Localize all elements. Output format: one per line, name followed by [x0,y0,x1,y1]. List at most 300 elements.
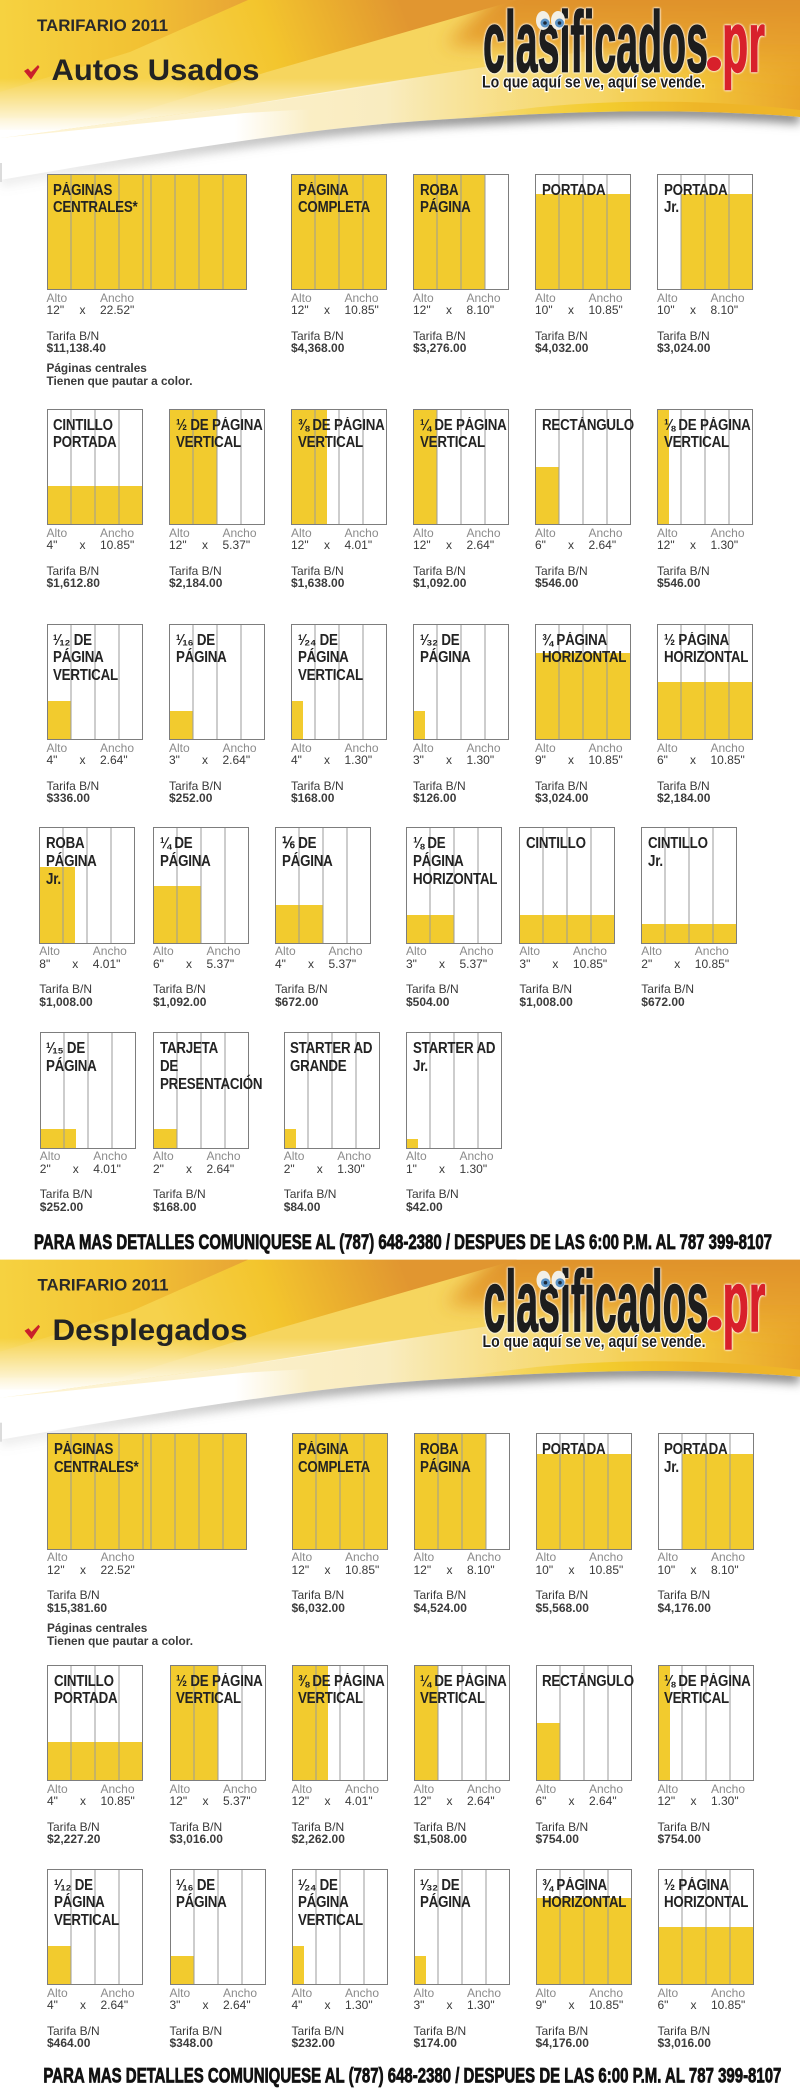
card: 1/24 de página vertical: ¹⁄₂₄ DE [298,1877,338,1894]
header background [0,0,800,186]
card: 3/8 de página vertical: $2,262.00 [292,1832,345,1846]
card: Cintillo portada: Alto [47,1782,68,1796]
card: 1/32 de página: $174.00 [414,2036,457,2050]
card: Roba página Jr.: $1,008.00 [39,995,93,1009]
card: Roba página: x [446,303,452,317]
card: Portada Jr.: Alto [657,291,678,305]
title: Tarifario 2011: TARIFARIO 2011 [38,1276,168,1295]
card: 1/32 de página: Ancho [466,741,501,755]
card: 1/8 de página horizontal: 3" [406,957,417,971]
card: 1/4 de página: PÁGINA [160,853,210,870]
card: 1/8 de página vertical: VERTICAL [664,434,728,451]
card: Roba página Jr.: Tarifa B/N [39,982,92,996]
card: 1/16 de página: Alto [169,741,190,755]
card: 1/2 de página vertical: $2,184.00 [169,576,222,590]
card: Página completa: PÁGINA [298,1441,349,1458]
card: 1/15 de página [40,1032,136,1214]
card: Página completa: $4,368.00 [291,341,344,355]
card: 1/12 de página vertical: x [80,753,86,767]
card: Página completa: Ancho [345,1550,379,1564]
card: 1/16 de página: 3" [169,753,180,767]
card: Portada: 10" [536,1563,553,1577]
card: 1/12 de página vertical [47,1869,143,2059]
card: 1/4 de página: 6" [153,957,164,971]
heading: Desplegados: Desplegados [52,1314,248,1347]
card: Cintillo Jr.: x [674,957,680,971]
card: Portada Jr.: $4,176.00 [658,1601,711,1615]
card: Cintillo portada: $1,612.80 [46,576,100,590]
card: 1/4 de página vertical: Ancho [466,526,501,540]
card: 1/24 de página vertical: Tarifa B/N [292,2024,344,2038]
card: 1/8 de página vertical: 12" [657,538,675,552]
card: Portada: Ancho [589,1550,623,1564]
card: 1/4 de página vertical: x [446,538,452,552]
card: 1/8 de página vertical: VERTICAL [664,1690,729,1707]
card: Roba página [414,1433,510,1615]
card: 1/16 de página: x [202,1998,208,2012]
card: Starter ad Jr. [406,1032,502,1214]
card: 1/4 de página: Tarifa B/N [153,982,206,996]
card: Starter ad Jr.: 1.30" [460,1162,487,1176]
card: Rectángulo [536,1665,632,1855]
card: Starter ad grande: $84.00 [284,1200,320,1214]
card: 3/8 de página vertical [292,1665,388,1846]
card: 1/32 de página: ¹⁄₃₂ DE [420,1877,459,1894]
card: 3/8 de página vertical: VERTICAL [298,434,362,451]
card: Cintillo: $1,008.00 [519,995,573,1009]
card: Rectángulo: Ancho [588,526,623,540]
card: 1/6 de página: PÁGINA [282,853,332,870]
card: Tarjeta de presentación: $168.00 [153,1200,196,1214]
card: 1/4 de página vertical: Alto [414,1782,434,1796]
card: Cintillo portada [46,409,143,590]
card: 1/4 de página: $1,092.00 [153,995,206,1009]
card: Roba página: $3,276.00 [413,341,466,355]
card: Roba página Jr.: x [72,957,78,971]
card: Página completa: Alto [291,291,312,305]
note: páginas centrales: Tienen que pautar a color. [46,374,192,388]
card: Cintillo portada: PORTADA [54,1690,117,1707]
card: 1/12 de página vertical: $464.00 [47,2036,90,2050]
card: 1/4 de página [153,827,249,1009]
card: 1/32 de página: x [446,753,452,767]
card: 1/12 de página vertical: ¹⁄₁₂ DE [53,632,92,649]
card: Portada: $4,032.00 [535,341,588,355]
card: Página completa: 10.85" [345,1563,379,1577]
card: 1/16 de página: Tarifa B/N [169,779,222,793]
card: Portada: Alto [536,1550,556,1564]
card: Página completa: 12" [291,303,309,317]
note: páginas centrales: Páginas centrales [46,361,147,375]
card: Rectángulo: RECTÁNGULO [542,1673,634,1690]
card: 1/2 página horizontal: Ancho [711,1986,745,2000]
card: Páginas centrales: CENTRALES* [53,199,138,216]
card: 1/2 página horizontal: Tarifa B/N [658,2024,710,2038]
card: 3/4 página horizontal [536,1869,632,2059]
card: Starter ad Jr.: Alto [406,1149,427,1163]
card: Roba página Jr.: 8" [39,957,50,971]
card: 1/32 de página: 1.30" [467,1998,495,2012]
card: 1/2 de página vertical: 12" [169,538,187,552]
card: 1/8 de página vertical: $754.00 [658,1832,701,1846]
card: Páginas centrales: Ancho [100,291,134,305]
card: Páginas centrales: Alto [46,291,67,305]
card: 1/4 de página vertical: Tarifa B/N [413,564,466,578]
card: 1/32 de página: Alto [414,1986,434,2000]
header: Autos Usados [0,0,800,186]
card: 1/12 de página vertical: Tarifa B/N [47,2024,100,2038]
card: Página completa: 12" [292,1563,309,1577]
card: Portada Jr.: Alto [658,1550,678,1564]
logo: clasificados.pr: Lo que aquí se ve, aquí se vende. [482,74,705,92]
card: Páginas centrales: $11,138.40 [46,341,106,355]
card: 1/12 de página vertical: 4" [47,1998,58,2012]
card: 1/4 de página vertical: VERTICAL [420,1690,485,1707]
card: 1/2 de página vertical: VERTICAL [176,434,240,451]
card: 3/8 de página vertical: Alto [292,1782,312,1796]
card: 3/8 de página vertical: Tarifa B/N [292,1820,344,1834]
card: Rectángulo: $754.00 [536,1832,579,1846]
card: Portada Jr.: Ancho [711,1550,745,1564]
card: 3/4 página horizontal: Ancho [588,741,623,755]
card: 1/15 de página: x [73,1162,79,1176]
card: 3/8 de página vertical: VERTICAL [298,1690,363,1707]
card: 1/2 de página vertical: ½ DE PÁGINA [176,1673,263,1690]
card: Cintillo Jr.: $672.00 [641,995,685,1009]
card: 1/8 de página vertical: ⅛ DE PÁGINA [664,1673,751,1690]
card: 1/6 de página: x [308,957,314,971]
card: 1/4 de página vertical: 2.64" [467,1794,495,1808]
card: 1/24 de página vertical: PÁGINA [298,649,348,666]
card: Portada: PORTADA [542,182,605,199]
card: 1/24 de página vertical: 4" [291,753,302,767]
card: Portada [535,174,631,355]
card: Páginas centrales: Tarifa B/N [47,1588,100,1602]
card: Cintillo portada: 10.85" [100,1794,135,1808]
card: 1/8 de página vertical: Ancho [710,526,745,540]
card: 1/12 de página vertical: $336.00 [46,791,90,805]
card: 1/8 de página horizontal: HORIZONTAL [412,871,497,888]
card: 1/24 de página vertical: 4" [292,1998,302,2012]
card: 1/24 de página vertical: PÁGINA [298,1894,349,1911]
card: Roba página: Tarifa B/N [414,1588,466,1602]
card: Cintillo Jr. [641,827,737,1009]
card: 1/24 de página vertical: Tarifa B/N [291,779,344,793]
card: 1/24 de página vertical: Alto [291,741,312,755]
card: 1/12 de página vertical: Ancho [100,1986,135,2000]
card: 1/8 de página vertical: ⅛ DE PÁGINA [664,416,750,434]
card: Tarjeta de presentación: 2" [153,1162,164,1176]
card: 1/32 de página: 1.30" [466,753,494,767]
card: Starter ad grande: Ancho [337,1149,371,1163]
card: 1/2 página horizontal: x [690,1998,696,2012]
icon: red check [24,1325,40,1339]
card: Starter ad grande: Alto [284,1149,304,1163]
card: Cintillo portada: CINTILLO [54,1673,113,1690]
card: 1/6 de página: Alto [275,944,296,958]
card: Portada: 10" [535,303,553,317]
card: 1/4 de página vertical [414,1665,510,1855]
card: 1/4 de página vertical: Alto [413,526,434,540]
card: Página completa: PÁGINA [298,182,348,199]
card: Roba página [413,174,509,355]
card: 3/8 de página vertical: $1,638.00 [291,576,344,590]
card: Páginas centrales: 22.52" [100,1563,135,1577]
card: 3/8 de página vertical: x [324,1794,330,1808]
card: 1/4 de página: 5.37" [206,957,234,971]
card: 1/24 de página vertical: x [324,1998,330,2012]
card: 1/32 de página: 3" [414,1998,424,2012]
card: Roba página Jr. [39,827,135,1009]
card: 1/32 de página: Tarifa B/N [414,2024,466,2038]
card: 1/16 de página: 2.64" [222,753,250,767]
card: Cintillo Jr.: Alto [641,944,662,958]
card: Cintillo Jr.: Tarifa B/N [641,982,694,996]
card: Páginas centrales: $15,381.60 [47,1601,107,1615]
card: 3/4 página horizontal: 9" [535,753,546,767]
card: 3/8 de página vertical: Ancho [344,526,379,540]
card: 1/4 de página vertical [413,409,509,590]
card: 1/15 de página: ¹⁄₁₅ DE [46,1040,85,1057]
card: 1/8 de página vertical: 12" [658,1794,675,1808]
card: 3/4 página horizontal: Tarifa B/N [535,779,588,793]
card: 1/4 de página: Ancho [206,944,241,958]
card: Rectángulo: RECTÁNGULO [542,416,633,434]
card: 3/4 página horizontal: $4,176.00 [536,2036,589,2050]
card: 1/24 de página vertical: $168.00 [291,791,334,805]
header background [0,1260,800,1446]
card: Portada: Alto [535,291,556,305]
card: 1/32 de página: PÁGINA [420,649,470,666]
card: Cintillo: Tarifa B/N [519,982,572,996]
card: Portada: x [568,1563,574,1577]
card: 1/16 de página: Tarifa B/N [170,2024,222,2038]
card: 1/8 de página vertical: x [690,1794,696,1808]
card: 1/16 de página [170,1869,266,2059]
card: Cintillo portada: Ancho [100,1782,135,1796]
card: 3/4 página horizontal: Alto [535,741,556,755]
card: 1/6 de página [275,827,371,1009]
card: Páginas centrales: 12" [47,1563,65,1577]
heading: Autos Usados: Autos Usados [52,54,260,87]
card: Cintillo portada: x [80,538,86,552]
card: Portada: PORTADA [542,1441,605,1458]
card: 1/2 de página vertical: Tarifa B/N [170,1820,222,1834]
section: Autos Usados rate cards [39,174,753,1214]
card: 1/15 de página: Alto [40,1149,60,1163]
card: Páginas centrales: 22.52" [100,303,134,317]
card: Cintillo portada: PORTADA [53,434,116,451]
card: 1/24 de página vertical [291,624,387,805]
card: Rectángulo: x [568,538,574,552]
card: 1/2 de página vertical: Ancho [222,526,257,540]
card: 1/24 de página vertical: Alto [292,1986,312,2000]
card: 1/32 de página: 3" [413,753,424,767]
card: Roba página Jr.: ROBA [46,835,84,852]
card: Rectángulo: $546.00 [535,576,578,590]
card: Roba página: Ancho [466,291,501,305]
card: 1/15 de página: 4.01" [93,1162,121,1176]
card: Portada Jr.: x [690,303,696,317]
card: 1/2 de página vertical: ½ DE PÁGINA [176,416,262,434]
card: 1/2 de página vertical: 12" [170,1794,187,1808]
card: 3/8 de página vertical: 4.01" [344,538,372,552]
card: Cintillo Jr.: Jr. [648,853,663,870]
card: 1/2 página horizontal: 10.85" [710,753,745,767]
card: 1/6 de página: $672.00 [275,995,318,1009]
card: Portada: x [568,303,574,317]
card: 1/12 de página vertical: PÁGINA [54,1894,104,1911]
card: Página completa [291,174,387,355]
card: 1/2 página horizontal: x [690,753,696,767]
card: Starter ad grande: x [317,1162,323,1176]
card: 1/8 de página horizontal: Ancho [460,944,494,958]
card: 3/4 página horizontal: ¾ PÁGINA [542,1877,607,1894]
card: 1/4 de página vertical: $1,508.00 [414,1832,467,1846]
card: Roba página: ROBA [420,1441,458,1458]
card: 1/12 de página vertical: VERTICAL [53,667,118,684]
card: Starter ad grande [284,1032,380,1214]
card: 1/32 de página: PÁGINA [420,1894,471,1911]
card: 1/24 de página vertical: VERTICAL [298,667,362,684]
card: 1/2 página horizontal: ½ PÁGINA [664,1877,729,1894]
card: Portada: 10.85" [589,1563,623,1577]
card: 1/12 de página vertical: Alto [47,1986,68,2000]
card: 1/8 de página vertical: Alto [658,1782,678,1796]
icon: red check [24,65,40,80]
card: 1/24 de página vertical: VERTICAL [298,1912,363,1929]
card: Cintillo [519,827,615,1009]
card: 1/8 de página vertical: $546.00 [657,576,700,590]
card: Cintillo portada: 4" [46,538,57,552]
card: 1/8 de página vertical: 1.30" [711,1794,739,1808]
card: Páginas centrales: PÁGINAS [53,182,112,199]
card: 1/2 página horizontal: $3,016.00 [658,2036,711,2050]
card: 1/12 de página vertical: VERTICAL [54,1912,118,1929]
card: 1/8 de página horizontal: Tarifa B/N [406,982,459,996]
card: Cintillo portada: 10.85" [100,538,134,552]
card: 1/2 de página vertical: $3,016.00 [170,1832,223,1846]
card: 3/8 de página vertical: ⅜ DE PÁGINA [298,416,384,434]
card: 1/2 de página vertical [169,409,265,590]
card: Portada Jr. [657,174,753,355]
card: 1/4 de página vertical: 2.64" [466,538,494,552]
card: 1/32 de página: Tarifa B/N [413,779,466,793]
card: Cintillo: CINTILLO [526,835,586,852]
card: 1/2 página horizontal: HORIZONTAL [664,1894,748,1911]
card: 1/24 de página vertical: x [324,753,330,767]
card: 1/4 de página vertical: 12" [413,538,431,552]
card: Cintillo Jr.: CINTILLO [648,835,708,852]
card: Starter ad grande: Tarifa B/N [284,1187,336,1201]
note: páginas centrales: Tienen que pautar a color. [47,1634,193,1648]
card: Starter ad Jr.: Ancho [460,1149,494,1163]
card: 1/2 página horizontal [658,1869,754,2059]
card: 1/16 de página: x [202,753,208,767]
card: 3/4 página horizontal: 10.85" [588,753,623,767]
card: 1/2 página horizontal: 6" [658,1998,668,2012]
card: Roba página: Ancho [467,1550,501,1564]
card: Tarjeta de presentación: 2.64" [206,1162,234,1176]
card: 1/2 de página vertical: x [202,538,208,552]
card: 1/15 de página: $252.00 [40,1200,83,1214]
section: Desplegados rate cards [47,1433,754,2050]
card: 1/32 de página: x [446,1998,452,2012]
card: Tarjeta de presentación: PRESENTACIÓN [160,1076,262,1093]
card: 3/4 página horizontal: 9" [536,1998,546,2012]
card: Tarjeta de presentación: Ancho [206,1149,241,1163]
card: 1/24 de página vertical: $232.00 [292,2036,335,2050]
card: 3/4 página horizontal [535,624,631,805]
card: 1/16 de página: Ancho [223,1986,257,2000]
card: Portada [536,1433,632,1615]
card: 1/16 de página: ¹⁄₁₆ DE [176,632,214,649]
card: Cintillo portada: CINTILLO [53,416,113,434]
card: Cintillo Jr.: Ancho [695,944,729,958]
card: 1/2 de página vertical: Tarifa B/N [169,564,222,578]
card: 1/12 de página vertical: Ancho [100,741,134,755]
card: Página completa: x [324,303,330,317]
card: 1/12 de página vertical [46,624,143,805]
card: 1/12 de página vertical: ¹⁄₁₂ DE [54,1877,92,1894]
card: 3/4 página horizontal: 10.85" [589,1998,623,2012]
card: Portada Jr.: 8.10" [710,303,738,317]
card: Páginas centrales [47,1433,247,1615]
card: Roba página Jr.: 4.01" [93,957,120,971]
card: Roba página: 8.10" [467,1563,495,1577]
card: 1/6 de página: 4" [275,957,286,971]
card: Rectángulo [535,409,634,590]
card: 1/4 de página vertical: Ancho [467,1782,501,1796]
card: 1/12 de página vertical: x [80,1998,86,2012]
card: 1/16 de página: $252.00 [169,791,212,805]
card: Rectángulo: Ancho [589,1782,623,1796]
card: Página completa: COMPLETA [298,1459,370,1476]
card: 1/8 de página vertical: 1.30" [710,538,738,552]
card: Páginas centrales: 12" [46,303,64,317]
card: 1/32 de página: $126.00 [413,791,456,805]
card: 3/4 página horizontal: Tarifa B/N [536,2024,588,2038]
card: Cintillo: Alto [519,944,540,958]
card: 1/8 de página horizontal: PÁGINA [412,853,463,870]
card: 3/8 de página vertical: 12" [291,538,309,552]
card: 1/32 de página: Alto [413,741,434,755]
card: 1/4 de página vertical: 12" [414,1794,431,1808]
card: 3/4 página horizontal: Alto [536,1986,556,2000]
card: 1/2 página horizontal: Ancho [710,741,745,755]
card: 1/24 de página vertical [292,1869,388,2059]
card: 1/8 de página horizontal [406,827,502,1009]
card: Starter ad grande: 1.30" [337,1162,365,1176]
card: Portada Jr.: 10" [657,303,675,317]
card: Página completa: x [324,1563,330,1577]
card: 1/8 de página vertical: x [690,538,696,552]
card: 3/4 página horizontal: Ancho [589,1986,623,2000]
card: 1/2 página horizontal: $2,184.00 [657,791,710,805]
logo: clasificados.pr: Lo que aquí se ve, aquí se vende. [482,1333,706,1351]
card: Rectángulo: Tarifa B/N [536,1820,588,1834]
header: Desplegados [0,1254,800,1446]
card: 1/12 de página vertical: 2.64" [100,1998,128,2012]
card: Cintillo: 10.85" [573,957,607,971]
card: 1/6 de página: ⅙ DE [282,835,316,852]
card: 1/32 de página [414,1869,510,2059]
card: 3/8 de página vertical: Alto [291,526,312,540]
card: 1/2 de página vertical: Alto [169,526,190,540]
card: Starter ad Jr.: x [439,1162,445,1176]
card: Cintillo: 3" [519,957,530,971]
card: 1/2 de página vertical: x [202,1794,208,1808]
